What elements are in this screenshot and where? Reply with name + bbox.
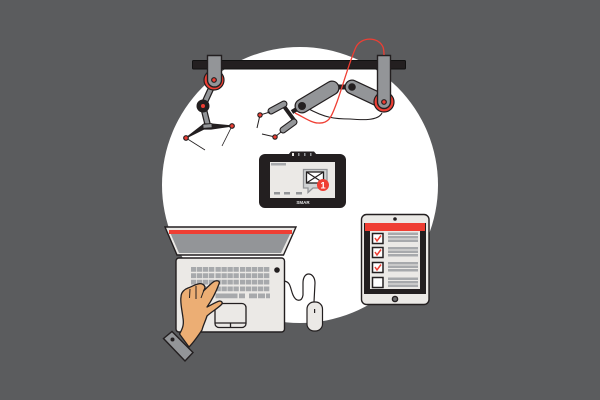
hand [180,281,222,347]
message icon: 1 [320,180,326,192]
red cable [295,39,384,123]
status lights [292,153,312,156]
tablet with checklist [362,214,429,304]
checklist item 2 [372,247,418,258]
checklist item 3 [372,262,418,272]
control panel device: SMAR [296,200,310,205]
checklist item 1 [372,232,418,244]
mouse cable [284,274,315,302]
right robot arm [257,56,394,139]
checklist item 4 [372,278,418,288]
mouse [307,302,322,331]
robot rail [192,60,406,69]
white circle backdrop [162,47,438,323]
keyboard [191,267,270,298]
laptop screen [165,227,296,255]
hand on keyboard [164,281,222,361]
shirt cuff [164,332,193,361]
laptop [165,227,296,332]
control panel device [259,152,346,208]
laptop base [176,258,284,332]
touchpad [215,304,246,328]
camera dot [274,267,280,273]
left robot arm [184,56,234,150]
